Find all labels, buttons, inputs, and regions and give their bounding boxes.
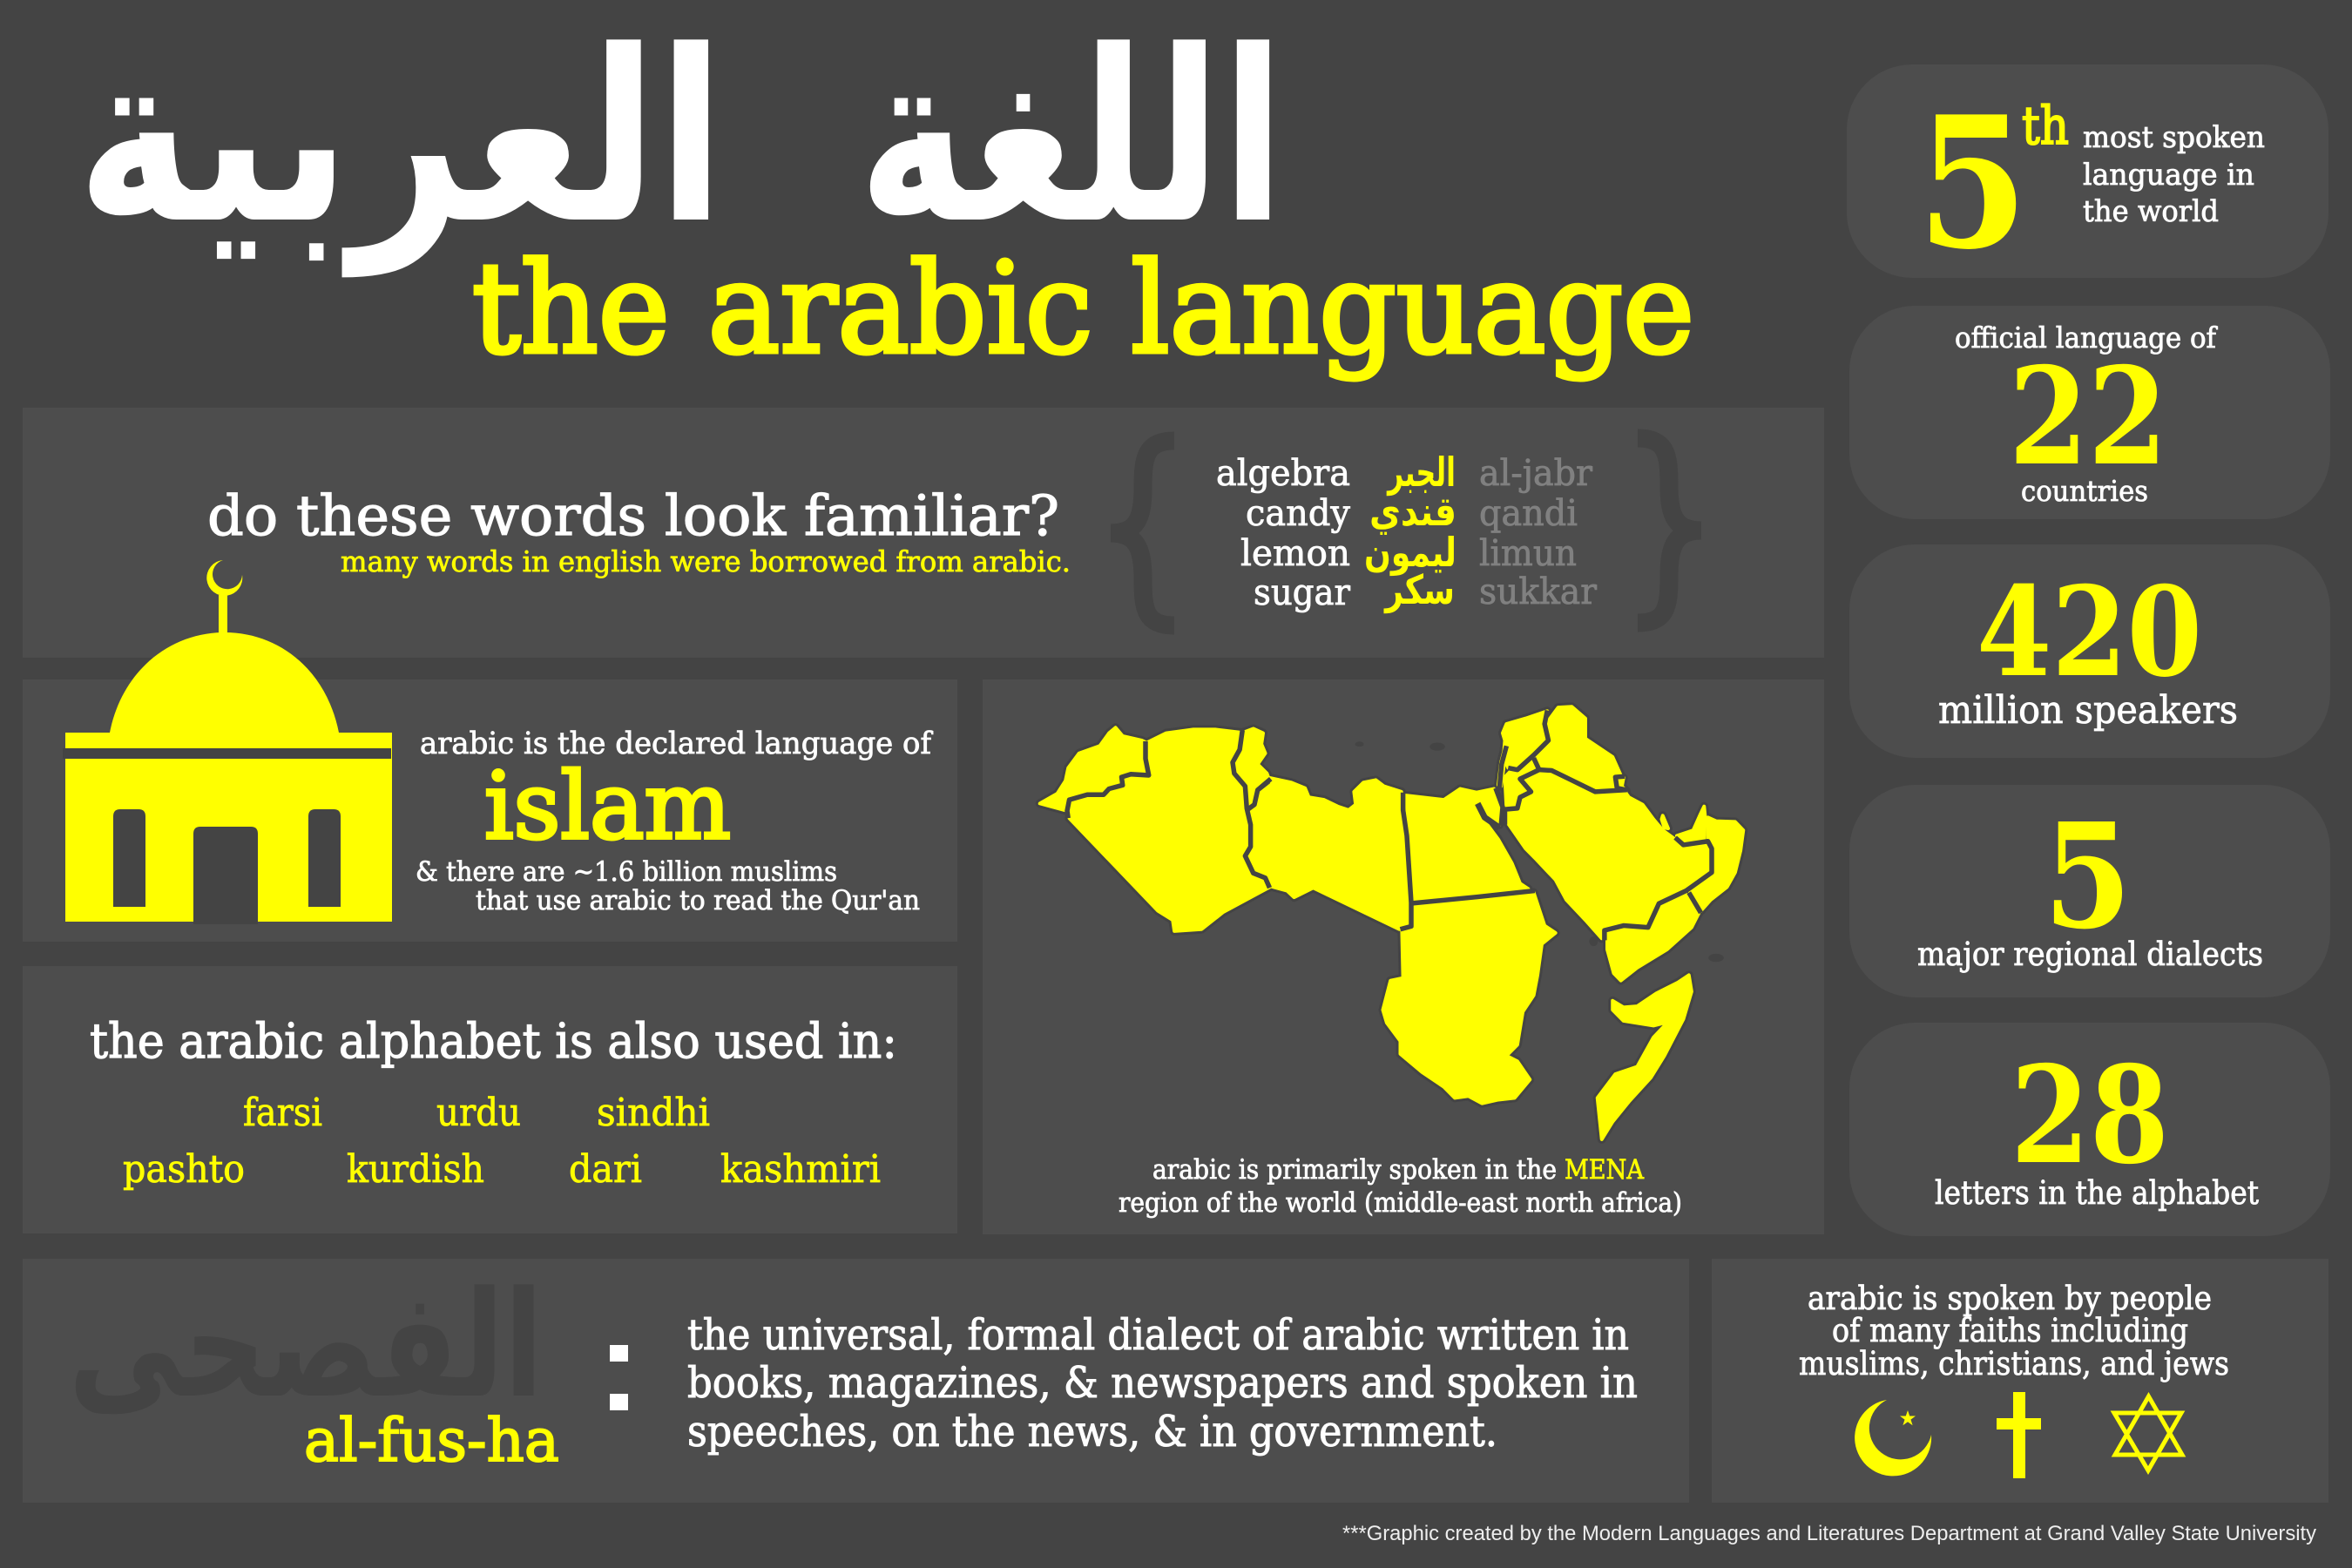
text: major regional dialects: major regional dialects [1917,936,2263,973]
icon: left brace [1111,441,1174,625]
word list: arabic: سكر [1383,566,1455,613]
heading: do these words look familiar: do these words look familiar? [207,484,1059,549]
icon: right brace [1638,438,1701,623]
number: 5: 5 [2044,792,2132,962]
language list: dari [569,1147,642,1192]
text: million speakers: million speakers [1938,688,2238,733]
icon: cross [1997,1392,2041,1478]
panel: islam [23,679,957,942]
card: 5 dialects [1849,785,2330,997]
text: many faiths: arabic is spoken by people [1808,1280,2212,1317]
word list: english: algebra [1216,452,1350,494]
title: arabic script: العربية [77,1,725,279]
word list: transliteration: limun [1479,532,1577,574]
text: definition: books, magazines, & newspapers and spoken in [687,1358,1638,1408]
text: muslims: & there are ~1.6 billion muslims [416,856,837,888]
map: mena countries [1040,706,1743,1139]
word list: transliteration: al-jabr [1479,452,1592,494]
number: 5: 5 [1917,78,2028,290]
panel: alphabet [23,966,957,1233]
text: many faiths [1799,1280,2229,1382]
card: 22 countries [1849,306,2330,519]
text: many faiths: of many faiths including [1832,1312,2188,1349]
language list [123,1091,881,1192]
text: quran: that use arabic to read the Qur'an [476,885,920,916]
word list: english [1216,452,1351,613]
card: 5th most spoken [1847,64,2328,290]
icon: crescent and star [1855,1400,1931,1476]
text: most spoken: the world [2083,194,2219,229]
map caption: arabic is primarily spoken in the [1152,1154,1557,1186]
panel: al-fus-ha [23,1259,1689,1503]
number: 28: 28 [2011,1037,2169,1194]
word list: transliteration [1479,452,1597,612]
number: 22: 22 [2009,338,2167,496]
text: definition [687,1310,1638,1456]
card: 420 million speakers [1849,544,2330,758]
word list: english: candy [1246,492,1351,534]
word list: arabic: قندي [1369,488,1456,535]
title: the arabic language: the arabic language [472,235,1694,382]
text: definition: the universal, formal dialect of arabic written in [687,1310,1629,1360]
footer credit: ***Graphic created by the Modern Languages and Literatures Department at Grand Valley State University [1342,1522,2316,1545]
text: most spoken [2083,120,2265,229]
language list: urdu [436,1091,521,1135]
word list: transliteration: qandi [1479,492,1578,534]
icon: mosque [63,560,392,924]
language list: farsi [243,1091,322,1135]
text: official language of: official language of [1955,321,2219,355]
text: definition: speeches, on the news, & in government. [687,1407,1497,1456]
language list: sindhi [597,1091,710,1135]
map caption [1119,1154,1682,1219]
word list: arabic [1364,449,1456,613]
heading: al-fus-ha: al-fus-ha [304,1407,559,1476]
word list: transliteration: sukkar [1479,571,1597,612]
text: most spoken: most spoken [2083,120,2265,155]
text: letters in the alphabet: letters in the alphabet [1935,1174,2259,1212]
text: many faiths: muslims, christians, and jews [1799,1345,2229,1382]
superscript: th: th [2022,96,2069,157]
word list: arabic: الجبر [1387,449,1456,496]
text: countries: countries [2021,474,2148,508]
word list: english: lemon [1240,532,1350,574]
heading: islam: islam [484,753,731,860]
language list: pashto [123,1147,245,1192]
heading: alphabet also used in: the arabic alphabet is also used in: [90,1013,897,1069]
title: arabic script [77,1,1285,279]
language list: kashmiri [720,1147,881,1192]
panel: map [983,679,1824,1234]
card: 28 letters [1849,1023,2330,1236]
number: 420: 420 [1977,560,2202,705]
text: most spoken: language in [2083,158,2254,193]
panel: faiths [1712,1259,2328,1503]
language list: kurdish [347,1147,484,1192]
word list: arabic: ليمون [1364,529,1456,576]
title: arabic script: اللغة [858,1,1285,276]
panel: familiar words [23,408,1824,658]
icon: star of david [2114,1396,2182,1470]
map caption: region of the world (middle-east north africa) [1119,1187,1682,1219]
colon [610,1345,628,1410]
word list: english: sugar [1254,571,1350,613]
text: declared language: arabic is the declared language of [420,727,934,761]
map caption: MENA [1565,1154,1645,1186]
subheading: borrowed words: many words in english were borrowed from arabic. [341,544,1071,578]
watermark: arabic word: الفصحى [68,1260,544,1430]
